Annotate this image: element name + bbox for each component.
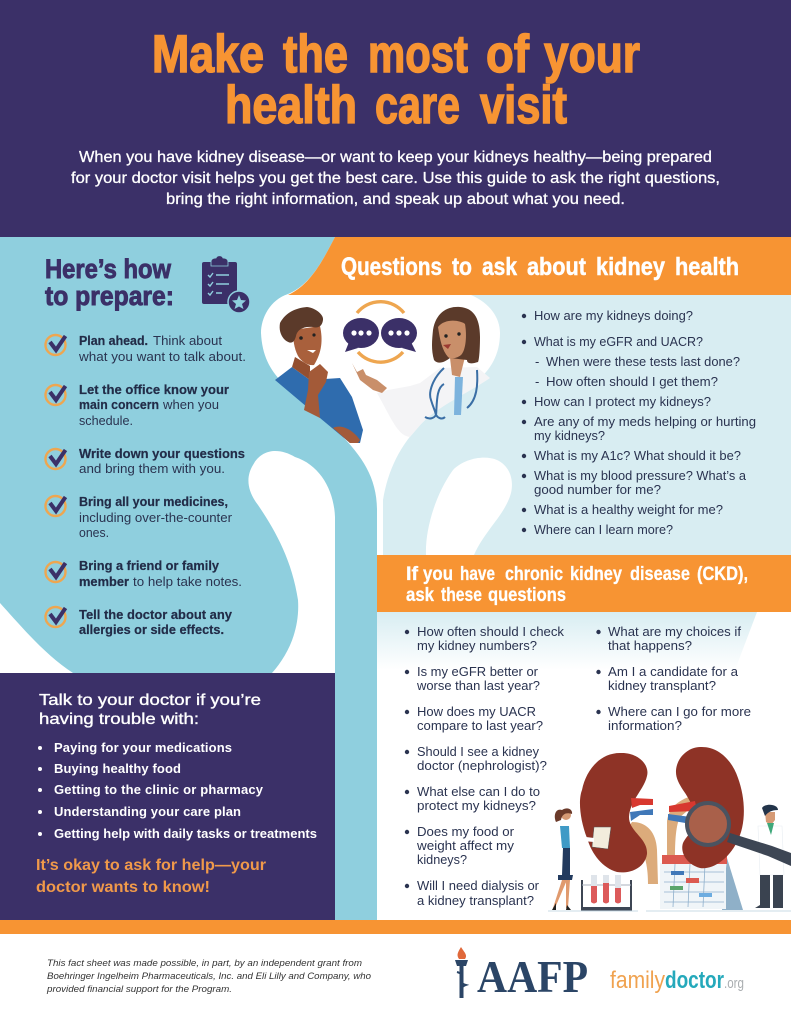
questions list: - — [535, 354, 539, 369]
heading: CKD questions: have — [460, 563, 495, 585]
title: care — [375, 76, 460, 135]
heading: questions to ask: about — [527, 253, 587, 281]
heading: questions to ask: ask — [482, 253, 517, 281]
check item: plan ahead: Think about — [153, 333, 222, 348]
questions list: How are my kidneys doing? — [534, 308, 693, 323]
heading: CKD questions: ask — [406, 584, 434, 606]
title: health — [225, 76, 357, 135]
CKD questions left column: How does my UACR — [417, 704, 536, 719]
CKD questions left column: Does my food or — [417, 824, 515, 839]
small female doctor — [552, 808, 594, 910]
check item: main concern: when you — [162, 397, 219, 412]
illustration: female doctor — [352, 307, 490, 437]
right kidney — [676, 747, 744, 868]
trouble list: Understanding your care plan — [54, 804, 241, 819]
questions list: Are any of my meds helping or hurting — [534, 414, 756, 429]
CKD questions right column: Am I a candidate for a — [608, 664, 739, 679]
check item: write down questions: and bring them with you. — [79, 461, 225, 476]
check item: bring a friend: to help take notes. — [133, 574, 242, 589]
CKD questions left column: a kidney transplant? — [417, 893, 534, 908]
orange encouragement: doctor wants to know! — [36, 879, 210, 896]
CKD questions left column: What else can I do to — [417, 784, 540, 799]
heading: CKD questions: (CKD), — [697, 563, 748, 585]
trouble list — [38, 740, 317, 841]
CKD questions left column: Is my eGFR better or — [417, 664, 539, 679]
talk heading: having trouble with: — [39, 711, 199, 728]
check item: bring medicines: ones. — [79, 525, 109, 540]
check item: plan ahead — [46, 333, 246, 364]
check item: allergies: Tell the doctor about any — [79, 607, 233, 622]
heading: questions to ask: Questions — [341, 253, 442, 281]
heading: CKD questions: disease — [630, 563, 690, 585]
check item: bring medicines — [46, 494, 233, 540]
footer disclaimer: provided financial support for the Program. — [46, 984, 232, 995]
panel: talk to your doctor — [0, 673, 335, 920]
heading: CKD questions: If — [406, 563, 418, 585]
logo: familydoctor.org: .org — [724, 975, 744, 992]
check item: plan ahead: Plan ahead. — [79, 333, 148, 348]
white shape in questions panel — [426, 458, 512, 555]
clipboard — [592, 827, 611, 849]
icon: clipboard with star — [202, 256, 250, 313]
logo: familydoctor.org: doctor — [665, 967, 724, 994]
magnifying glass — [687, 803, 791, 866]
title: visit — [480, 76, 567, 135]
footer disclaimer: Boehringer Ingelheim Pharmaceuticals, Inc. and Eli Lilly and Company, who — [47, 971, 371, 982]
panel: teal how to prepare background — [0, 237, 377, 920]
check item: main concern: Let the office know your — [79, 382, 229, 397]
CKD questions left column: How often should I check — [417, 624, 565, 639]
CKD questions left column: protect my kidneys? — [417, 798, 536, 813]
footer disclaimer — [46, 958, 371, 995]
CKD questions right column: that happens? — [608, 638, 692, 653]
ground line — [548, 910, 791, 912]
illustration: kidneys with doctors — [548, 747, 791, 911]
title: the — [283, 25, 348, 84]
heading: CKD questions — [406, 563, 748, 606]
check item: write down questions — [46, 446, 245, 476]
heading: how to prepare: Here’s how — [45, 254, 172, 284]
ureters — [628, 795, 695, 884]
panel: orange questions heading band — [288, 237, 791, 295]
check item: allergies — [46, 607, 233, 637]
icon: conversation bubbles — [343, 302, 417, 362]
CKD questions left column — [405, 624, 565, 908]
check item: bring medicines: including over-the-counter — [79, 510, 233, 525]
calendar — [660, 855, 743, 910]
intro text block: When you have kidney disease—or want to keep your kidneys healthy—being prepared — [79, 149, 712, 166]
illustration: man thinking — [275, 307, 363, 443]
check item: main concern: main concern — [79, 397, 159, 412]
logo: familydoctor.org — [610, 967, 744, 994]
check item: main concern — [46, 382, 229, 428]
check item: write down questions: Write down your questions — [79, 446, 245, 461]
CKD questions right column — [596, 624, 751, 733]
panel: CKD faded background — [377, 612, 757, 670]
questions list: What is a healthy weight for me? — [534, 502, 723, 517]
logo: familydoctor.org: family — [610, 967, 665, 994]
check item: allergies: allergies or side effects. — [79, 622, 224, 637]
questions list: How can I protect my kidneys? — [534, 394, 711, 409]
check item: main concern: schedule. — [79, 413, 133, 428]
heading: CKD questions: you — [423, 563, 453, 585]
panel: CKD orange heading band — [377, 555, 791, 612]
heading: CKD questions: chronic — [505, 563, 563, 585]
orange encouragement — [36, 857, 266, 896]
check item: bring medicines: Bring all your medicines, — [79, 494, 228, 509]
heading: CKD questions: questions — [488, 584, 566, 606]
check item: bring a friend: member — [79, 574, 129, 589]
title: most — [368, 25, 468, 84]
CKD questions left column: doctor (nephrologist)? — [417, 758, 547, 773]
questions list: When were these tests last done? — [546, 354, 740, 369]
CKD questions left column: compare to last year? — [417, 718, 543, 733]
CKD questions left column: Will I need dialysis or — [417, 878, 540, 893]
check item: bring a friend: Bring a friend or family — [79, 558, 220, 573]
talk heading: Talk to your doctor if you’re — [39, 692, 261, 709]
questions list: What is my A1c? What should it be? — [534, 448, 741, 463]
trouble list: Getting to the clinic or pharmacy — [54, 782, 264, 797]
questions list: good number for me? — [534, 482, 661, 497]
questions list: my kidneys? — [534, 428, 605, 443]
heading: questions to ask: kidney — [596, 253, 665, 281]
title — [152, 25, 640, 135]
heading: questions to ask: health — [675, 253, 739, 281]
heading: CKD questions: kidney — [570, 563, 622, 585]
CKD questions right column: What are my choices if — [608, 624, 741, 639]
heading: how to prepare — [45, 254, 174, 311]
heading: CKD questions: these — [441, 584, 482, 606]
questions list: What is my eGFR and UACR? — [534, 334, 703, 349]
orange footer band — [0, 920, 791, 934]
footer disclaimer: This fact sheet was made possible, in part, by an independent grant from — [47, 958, 362, 969]
CKD questions right column: Where can I go for more — [608, 704, 751, 719]
questions list: Where can I learn more? — [534, 522, 673, 537]
heading: questions to ask — [341, 253, 739, 281]
questions list: What is my blood pressure? What’s a — [534, 468, 747, 483]
intro text block: bring the right information, and speak up about what you need. — [166, 191, 625, 208]
trouble list: Buying healthy food — [54, 761, 181, 776]
panel: header background — [0, 0, 791, 237]
logo: AAFP: AAFP — [477, 951, 588, 1002]
checklist — [46, 333, 246, 637]
CKD questions left column: worse than last year? — [416, 678, 540, 693]
intro text block — [71, 149, 720, 208]
left kidney — [580, 753, 647, 872]
intro text block: for your doctor visit helps you get the best care. Use this guide to ask the right questions, — [71, 170, 720, 187]
trouble list: Paying for your medications — [54, 740, 232, 755]
trouble list: Getting help with daily tasks or treatments — [54, 826, 317, 841]
CKD questions left column: weight affect my — [416, 838, 515, 853]
title: Make — [152, 25, 264, 84]
panel: light blue questions background — [383, 295, 791, 555]
CKD questions left column: kidneys? — [417, 852, 467, 867]
talk heading — [39, 692, 261, 728]
questions list — [522, 308, 756, 537]
CKD questions left column: my kidney numbers? — [417, 638, 537, 653]
small male doctor — [755, 805, 784, 908]
check item: plan ahead: what you want to talk about. — [78, 349, 246, 364]
CKD questions left column: Should I see a kidney — [417, 744, 539, 759]
title: of — [486, 25, 529, 84]
CKD questions right column: kidney transplant? — [608, 678, 716, 693]
heading: questions to ask: to — [452, 253, 472, 281]
orange encouragement: It’s okay to ask for help—your — [36, 857, 266, 874]
questions list: How often should I get them? — [546, 374, 718, 389]
heading: how to prepare: to prepare: — [45, 281, 174, 311]
CKD questions right column: information? — [608, 718, 682, 733]
test tube rack — [581, 875, 632, 910]
check item: bring a friend — [46, 558, 242, 589]
questions list: - — [535, 374, 539, 389]
renal vessels — [631, 798, 697, 812]
title: your — [544, 25, 640, 84]
